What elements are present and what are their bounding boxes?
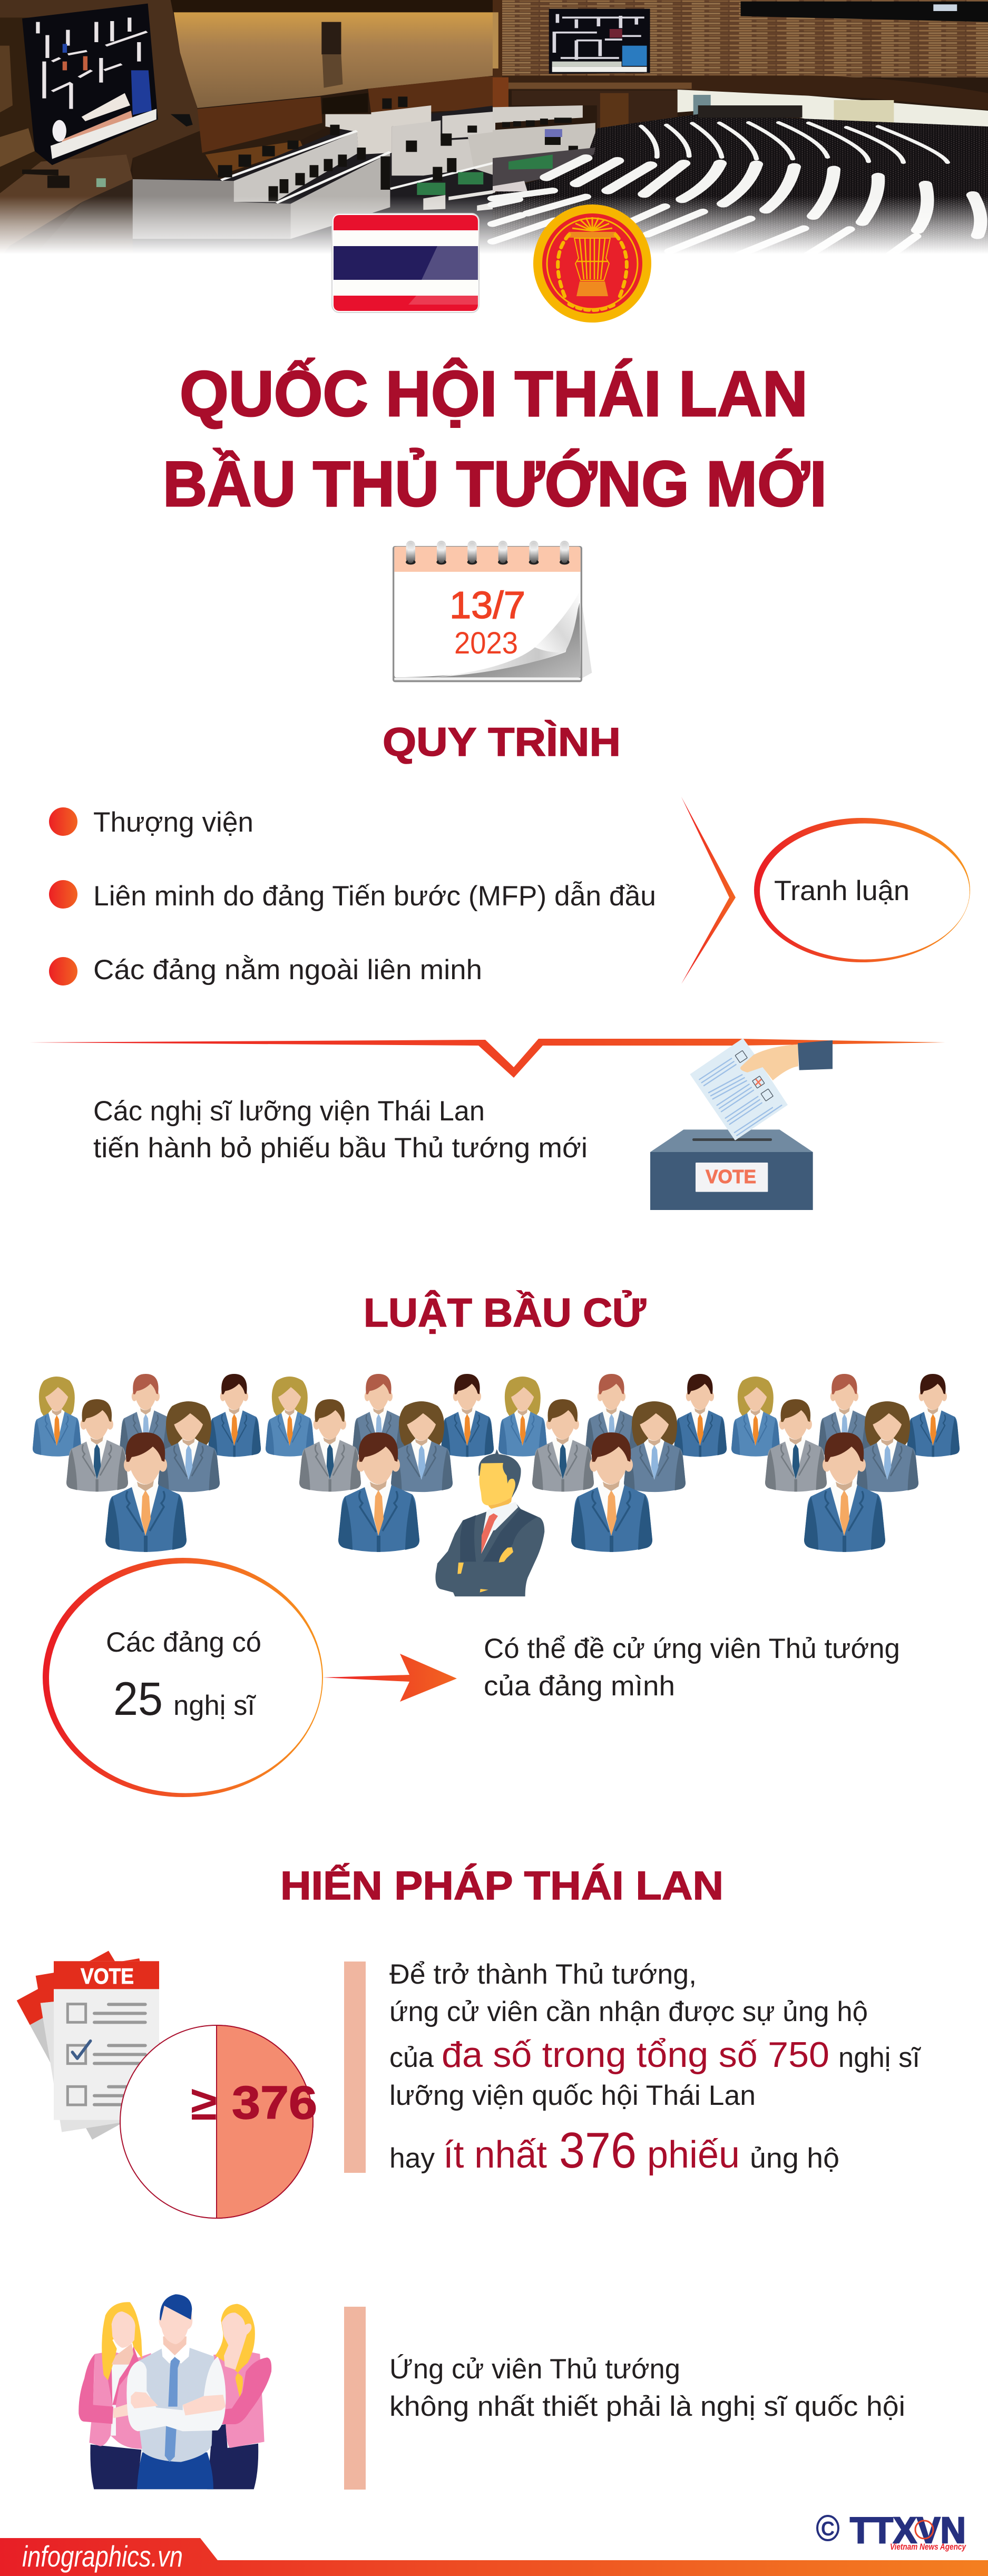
process list [49,807,656,985]
bullet 2 [49,880,77,909]
icon: calendar with date: 13/7 [449,584,525,627]
logo: TTXVN: TTXVN [850,2510,966,2551]
left video screen [22,4,158,165]
text: co the de cu [484,1633,900,1702]
text block: majority: Để trở thành Thủ tướng, [389,1959,697,1990]
bullet 3 [49,957,77,985]
icon: three candidates [79,2294,271,2489]
text: thuong vien: Thượng viện [93,807,253,838]
callout: 25 nghi si [43,1558,323,1797]
icon: ballot box with hand [650,1038,833,1210]
accent bar 2 [344,2307,366,2490]
icon: Thai parliament emblem [533,204,651,323]
callout: 25 nghi si: 25 [113,1672,163,1725]
accent bar 1 [344,1962,366,2173]
glass wall [512,91,678,128]
icon: leader figure [435,1449,544,1596]
callout: 25 nghi si: Các đảng có [106,1627,261,1658]
logo: TTXVN: C [821,2518,835,2540]
footer band [0,2538,988,2576]
text: cac nghi si: tiến hành bỏ phiếu bầu Thủ tướng mới [93,1133,588,1164]
text block: majority: của [389,2042,434,2073]
text block: candidate note: Ứng cử viên Thủ tướng [389,2354,680,2385]
footer band: infographics.vn [22,2540,183,2573]
logo: TTXVN: Vietnam News Agency [890,2542,966,2552]
text block: majority: phiếu [647,2134,740,2176]
text block: majority [389,1959,921,2179]
text: cac nghi si: Các nghị sĩ lưỡng viện Thái Lan [93,1096,485,1127]
title: BẦU THỦ TƯỚNG MỚI [163,448,827,520]
divider with notch [30,1039,945,1078]
header photo: parliament chamber [0,0,988,258]
text block: majority: nghị sĩ [838,2042,921,2073]
text: co the de cu: Có thể đề cử ứng viên Thủ tướng [484,1633,900,1664]
text: cac nghi si [93,1096,588,1164]
icon: Thai flag [332,213,479,313]
text block: majority: 376 [559,2122,637,2179]
callout: tranh luan [754,818,970,962]
title: QUỐC HỘI THÁI LAN [180,358,808,430]
text block: majority: ứng cử viên cần nhận được sự ủng hộ [389,1996,868,2027]
center video screen [549,9,650,74]
icon: calendar with date: 2023 [454,626,518,660]
icon: ballot box with hand: VOTE [706,1166,756,1187]
text block: majority: lưỡng viện quốc hội Thái Lan [389,2080,756,2111]
crowd: group 2 [266,1374,494,1552]
heading: luat bau cu: LUẬT BẦU CỬ [364,1290,647,1335]
bullet 1 [49,807,77,836]
callout: tranh luan: Tranh luận [774,875,909,906]
heading: quy trinh: QUY TRÌNH [383,720,621,765]
crowd: group 4 [731,1374,960,1552]
text block: candidate note [389,2354,905,2422]
crowd: group 1 [33,1374,261,1552]
text block: majority: ít nhất [443,2134,547,2176]
pie chart: 376 of 750 [120,2025,317,2218]
arrow [323,1654,457,1702]
text block: candidate note: không nhất thiết phải là nghị sĩ quốc hội [389,2391,905,2422]
text block: majority: ủng hộ [750,2143,839,2174]
pie chart: 376 of 750: ≥ [191,2076,217,2130]
callout: 25 nghi si: nghị sĩ [173,1690,256,1721]
pie chart: 376 of 750: 376 [232,2076,317,2129]
text: co the de cu: của đảng mình [484,1671,675,1702]
text block: majority: đa số trong tổng số 750 [442,2035,829,2075]
icon: vote papers [17,1951,184,2140]
title [163,358,827,520]
icon: vote papers: VOTE [81,1964,134,1988]
text block: majority: hay [389,2143,435,2174]
text: cac dang: Các đảng nằm ngoài liên minh [93,954,482,985]
left wall panels are drawn over the floor [325,105,431,154]
icon: calendar with date [393,541,592,682]
heading: hien phap thai lan: HIẾN PHÁP THÁI LAN [280,1863,723,1908]
text: lien minh: Liên minh do đảng Tiến bước (MFP) dẫn đầu [93,881,656,912]
chevron arrow [681,797,736,984]
crowd: group 3 [498,1374,727,1552]
